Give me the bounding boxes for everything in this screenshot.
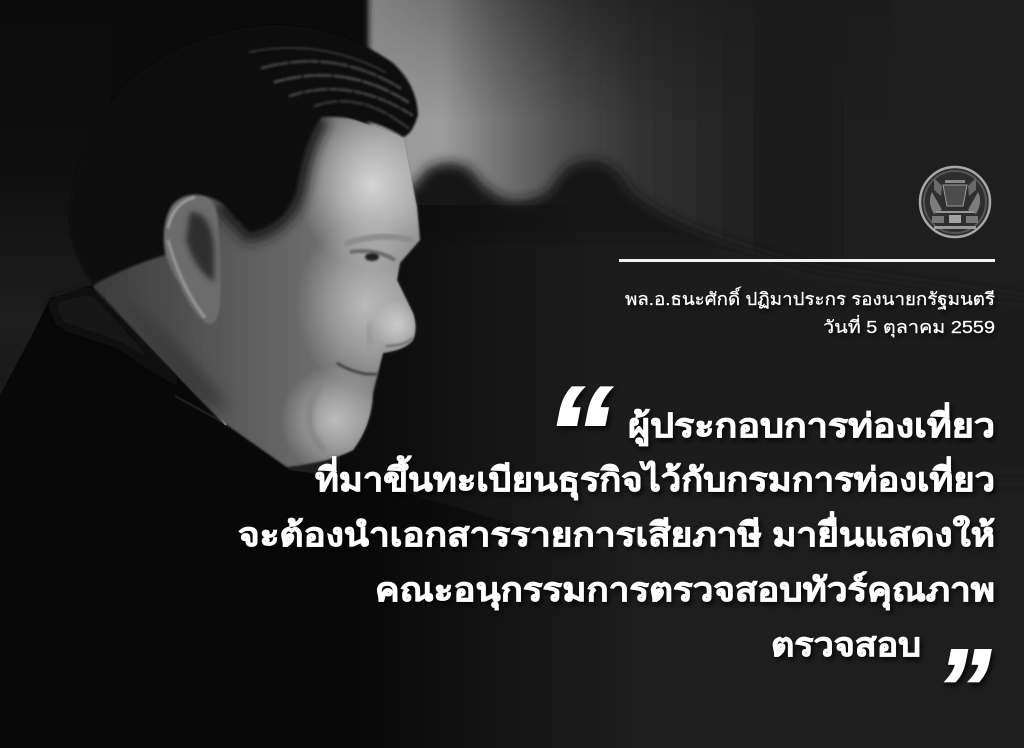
dark silhouettes in background — [370, 160, 1024, 480]
opening quotation mark: “ — [545, 358, 613, 509]
speaker name and date: พล.อ.ธนะศักดิ์ ปฏิมาประกร รองนายกรัฐมนตรี — [625, 286, 995, 310]
ear — [163, 193, 221, 324]
icon: government seal — [920, 167, 990, 237]
quote body: ผู้ประกอบการท่องเที่ยว — [628, 402, 995, 447]
face and neck — [92, 116, 422, 468]
hair — [70, 25, 418, 285]
closing quotation mark: ” — [935, 626, 991, 748]
speaker name and date — [625, 286, 995, 338]
blurred light patch behind the head — [340, 0, 842, 518]
quote body: คณะอนุกรรมการตรวจสอบทัวร์คุณภาพ — [375, 571, 995, 611]
divider line — [619, 259, 995, 262]
quote body — [238, 402, 995, 663]
portrait photo: man in profile — [0, 46, 534, 748]
soft hairline shadow on skin — [222, 117, 322, 232]
speaker name and date: วันที่ 5 ตุลาคม 2559 — [823, 315, 995, 338]
quote body: ตรวจสอบ — [771, 626, 921, 663]
jacket — [0, 285, 640, 748]
quote body: จะต้องนำเอกสารรายการเสียภาษี มายื่นแสดงให้ — [238, 511, 995, 553]
quote body: ที่มาขึ้นทะเบียนธุรกิจไว้กับกรมการท่องเที่ยว — [315, 455, 995, 501]
